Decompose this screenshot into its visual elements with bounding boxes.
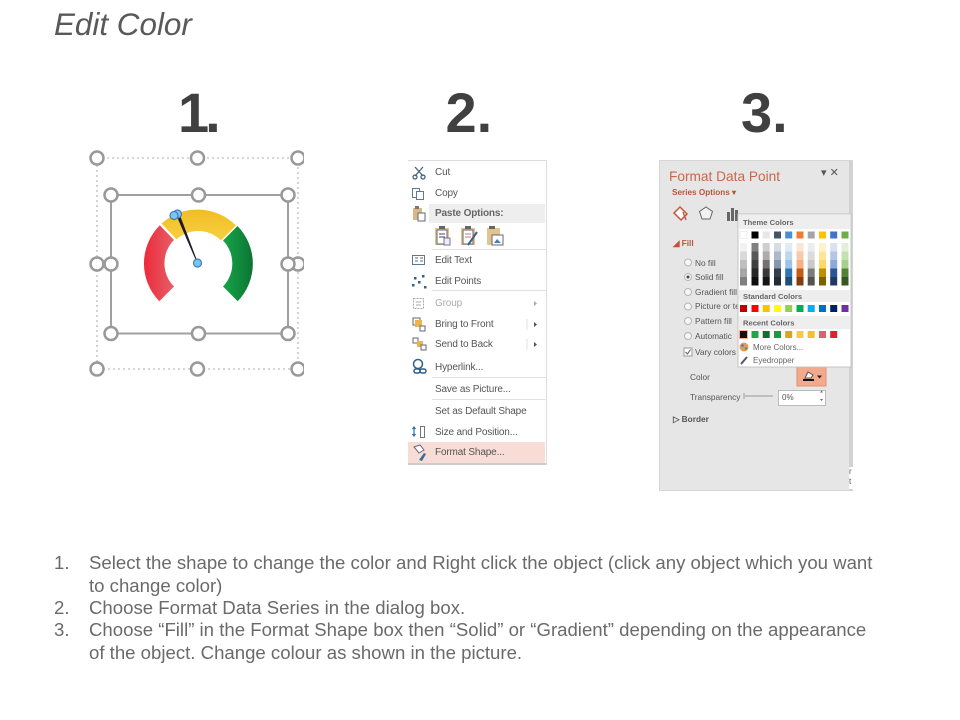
standard colors band bbox=[739, 290, 850, 302]
icon: size and position bbox=[412, 426, 424, 438]
fill section label: ◢ Fill bbox=[673, 238, 694, 248]
icon: paste picture bbox=[487, 226, 503, 245]
clipped text at panel edge: r bbox=[849, 467, 852, 476]
menu item labels: Edit Points bbox=[435, 276, 481, 287]
step 1 marker: 1. bbox=[54, 552, 70, 573]
icon: bars bbox=[727, 208, 738, 221]
menu item labels: Paste Options: bbox=[435, 208, 503, 219]
recent colors band: Recent Colors bbox=[743, 318, 794, 328]
clipped text at panel edge: t bbox=[849, 477, 851, 486]
panel close icons: ▾ ✕ bbox=[821, 167, 839, 179]
standard colors band: Standard Colors bbox=[743, 292, 802, 301]
gauge red segment bbox=[144, 225, 174, 301]
icon: cut bbox=[413, 167, 425, 179]
menu item labels: Copy bbox=[435, 188, 458, 199]
clipped text at panel edge bbox=[849, 467, 854, 489]
icon: paste merge format bbox=[461, 226, 477, 245]
step number 1: 1. bbox=[178, 81, 217, 144]
theme colors band bbox=[739, 215, 850, 229]
icon: paste bbox=[413, 206, 425, 221]
step 1 line 1: Select the shape to change the color and Right click the object (click any object which you want bbox=[89, 552, 872, 573]
context menu bbox=[408, 160, 547, 465]
menu item labels: Bring to Front bbox=[435, 319, 493, 330]
theme color base row bbox=[740, 232, 848, 238]
submenu arrows bbox=[534, 301, 537, 347]
color picker popup bbox=[738, 214, 852, 368]
menu item labels: Group bbox=[435, 298, 462, 309]
menu item labels: Hyperlink... bbox=[435, 362, 483, 373]
icon: format shape bbox=[414, 445, 426, 461]
icon: bring to front bbox=[413, 318, 425, 331]
step 3 line 2: of the object. Change colour as shown in the picture. bbox=[89, 642, 522, 663]
title: Edit Color bbox=[54, 7, 192, 42]
icon: paste keep text bbox=[435, 226, 450, 245]
transparency label: Transparency bbox=[690, 392, 740, 402]
gauge with selection handles bbox=[89, 150, 304, 377]
instructions list bbox=[54, 552, 872, 663]
fill options: No fill bbox=[695, 258, 716, 268]
format data point panel bbox=[659, 160, 853, 491]
step 3 marker: 3. bbox=[54, 619, 70, 640]
panel heading: Format Data Point bbox=[669, 169, 780, 184]
recent colors band bbox=[739, 316, 850, 329]
more colors item: More Colors... bbox=[753, 343, 803, 352]
menu item labels: Set as Default Shape bbox=[435, 406, 527, 417]
color label: Color bbox=[690, 372, 710, 382]
panel icons and controls bbox=[673, 206, 826, 401]
popup background bbox=[738, 214, 851, 367]
eyedropper item: Eyedropper bbox=[753, 356, 795, 365]
color picker button bbox=[797, 367, 826, 386]
menu item labels: Save as Picture... bbox=[435, 384, 511, 395]
radio buttons bbox=[684, 259, 692, 340]
icon: edit points bbox=[412, 275, 426, 288]
outer dotted selection box bbox=[90, 152, 304, 376]
step number 3: 3. bbox=[741, 81, 788, 144]
transparency slider bbox=[744, 393, 773, 399]
icon: edit text bbox=[412, 256, 424, 264]
menu item labels: Edit Text bbox=[435, 255, 472, 266]
transparency spinner bbox=[820, 390, 823, 401]
transparency value bbox=[778, 390, 826, 406]
icon: hyperlink bbox=[414, 360, 426, 373]
standard color swatches bbox=[740, 305, 848, 312]
gauge yellow segment bbox=[162, 210, 236, 240]
context menu icons bbox=[412, 166, 546, 461]
fill options: Vary colors l bbox=[695, 347, 740, 357]
transparency value: 0% bbox=[782, 393, 794, 402]
gauge green segment bbox=[223, 226, 253, 301]
step 2 marker: 2. bbox=[54, 597, 70, 618]
menu item labels: Size and Position... bbox=[435, 427, 518, 438]
step 2 text: Choose Format Data Series in the dialog box. bbox=[89, 597, 465, 618]
fill options: Automatic bbox=[695, 331, 732, 341]
step number 2: 2. bbox=[446, 81, 492, 144]
inner selection box bbox=[104, 188, 294, 340]
step 3 line 1: Choose “Fill” in the Format Shape box then “Solid” or “Gradient” depending on the appearance bbox=[89, 619, 866, 640]
icon: copy bbox=[412, 188, 424, 200]
fill options bbox=[695, 258, 740, 357]
menu item labels: Format Shape... bbox=[435, 447, 504, 458]
fill options: Pattern fill bbox=[695, 316, 732, 326]
menu item labels: Cut bbox=[435, 167, 450, 178]
icon: group bbox=[414, 298, 424, 308]
icon: send to back bbox=[413, 338, 426, 350]
fill options: Gradient fill bbox=[695, 287, 737, 297]
border section label: ▷ Border bbox=[673, 414, 709, 424]
theme colors band: Theme Colors bbox=[743, 218, 794, 227]
format shape highlight bbox=[408, 442, 545, 463]
icon: pentagon bbox=[700, 207, 712, 219]
menu item labels: Send to Back bbox=[435, 339, 493, 350]
paste options band bbox=[429, 204, 545, 223]
series options: Series Options ▾ bbox=[672, 188, 736, 197]
fill options: Picture or te bbox=[695, 301, 740, 311]
gauge needle bbox=[170, 210, 202, 267]
theme color shades bbox=[740, 243, 848, 286]
vary colors checkbox bbox=[684, 348, 692, 356]
step 1 line 2: to change color) bbox=[89, 575, 222, 596]
menu item labels bbox=[435, 167, 527, 458]
icon: fill bucket bbox=[674, 207, 687, 220]
fill options: Solid fill bbox=[695, 272, 724, 282]
recent color swatches bbox=[739, 330, 837, 339]
